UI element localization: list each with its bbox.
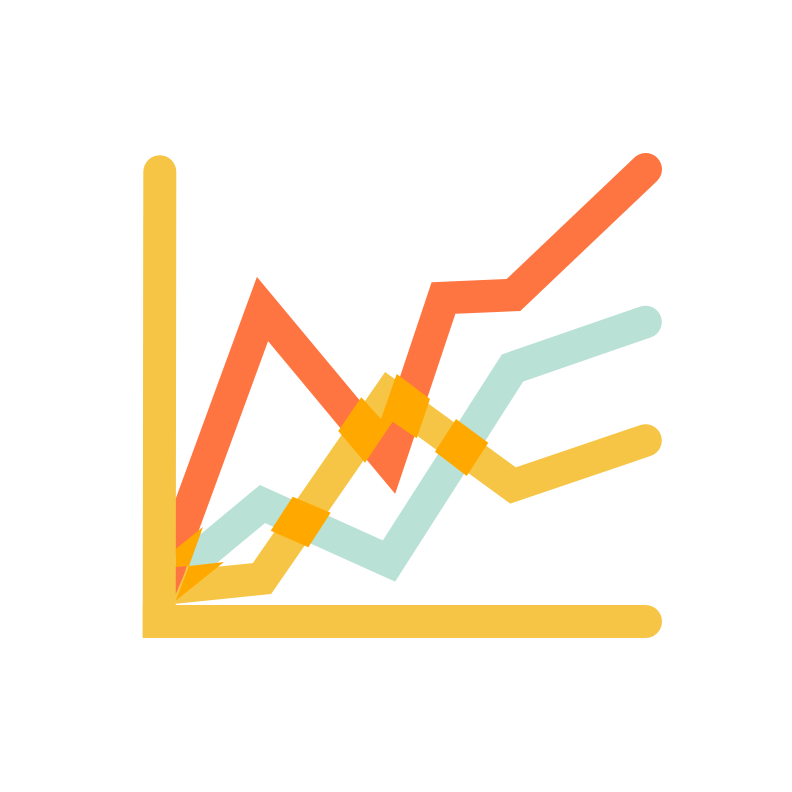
x axis: [143, 605, 662, 638]
yellow data line: [160, 395, 646, 589]
yellow slit near origin: [176, 566, 190, 601]
y axis: [143, 155, 176, 638]
chart axes: [143, 155, 662, 638]
overlap: origin lower: [176, 562, 224, 601]
teal data line: [160, 322, 646, 589]
overlap: origin upper: [176, 527, 203, 567]
overlap: yellow and teal, right: [435, 419, 488, 476]
overlap: yellow and orange, centre: [338, 374, 430, 463]
overlap highlights: [176, 374, 488, 601]
orange data line: [160, 169, 646, 589]
overlap: yellow and teal, left: [271, 497, 331, 547]
orange patch near origin: [175, 565, 188, 596]
